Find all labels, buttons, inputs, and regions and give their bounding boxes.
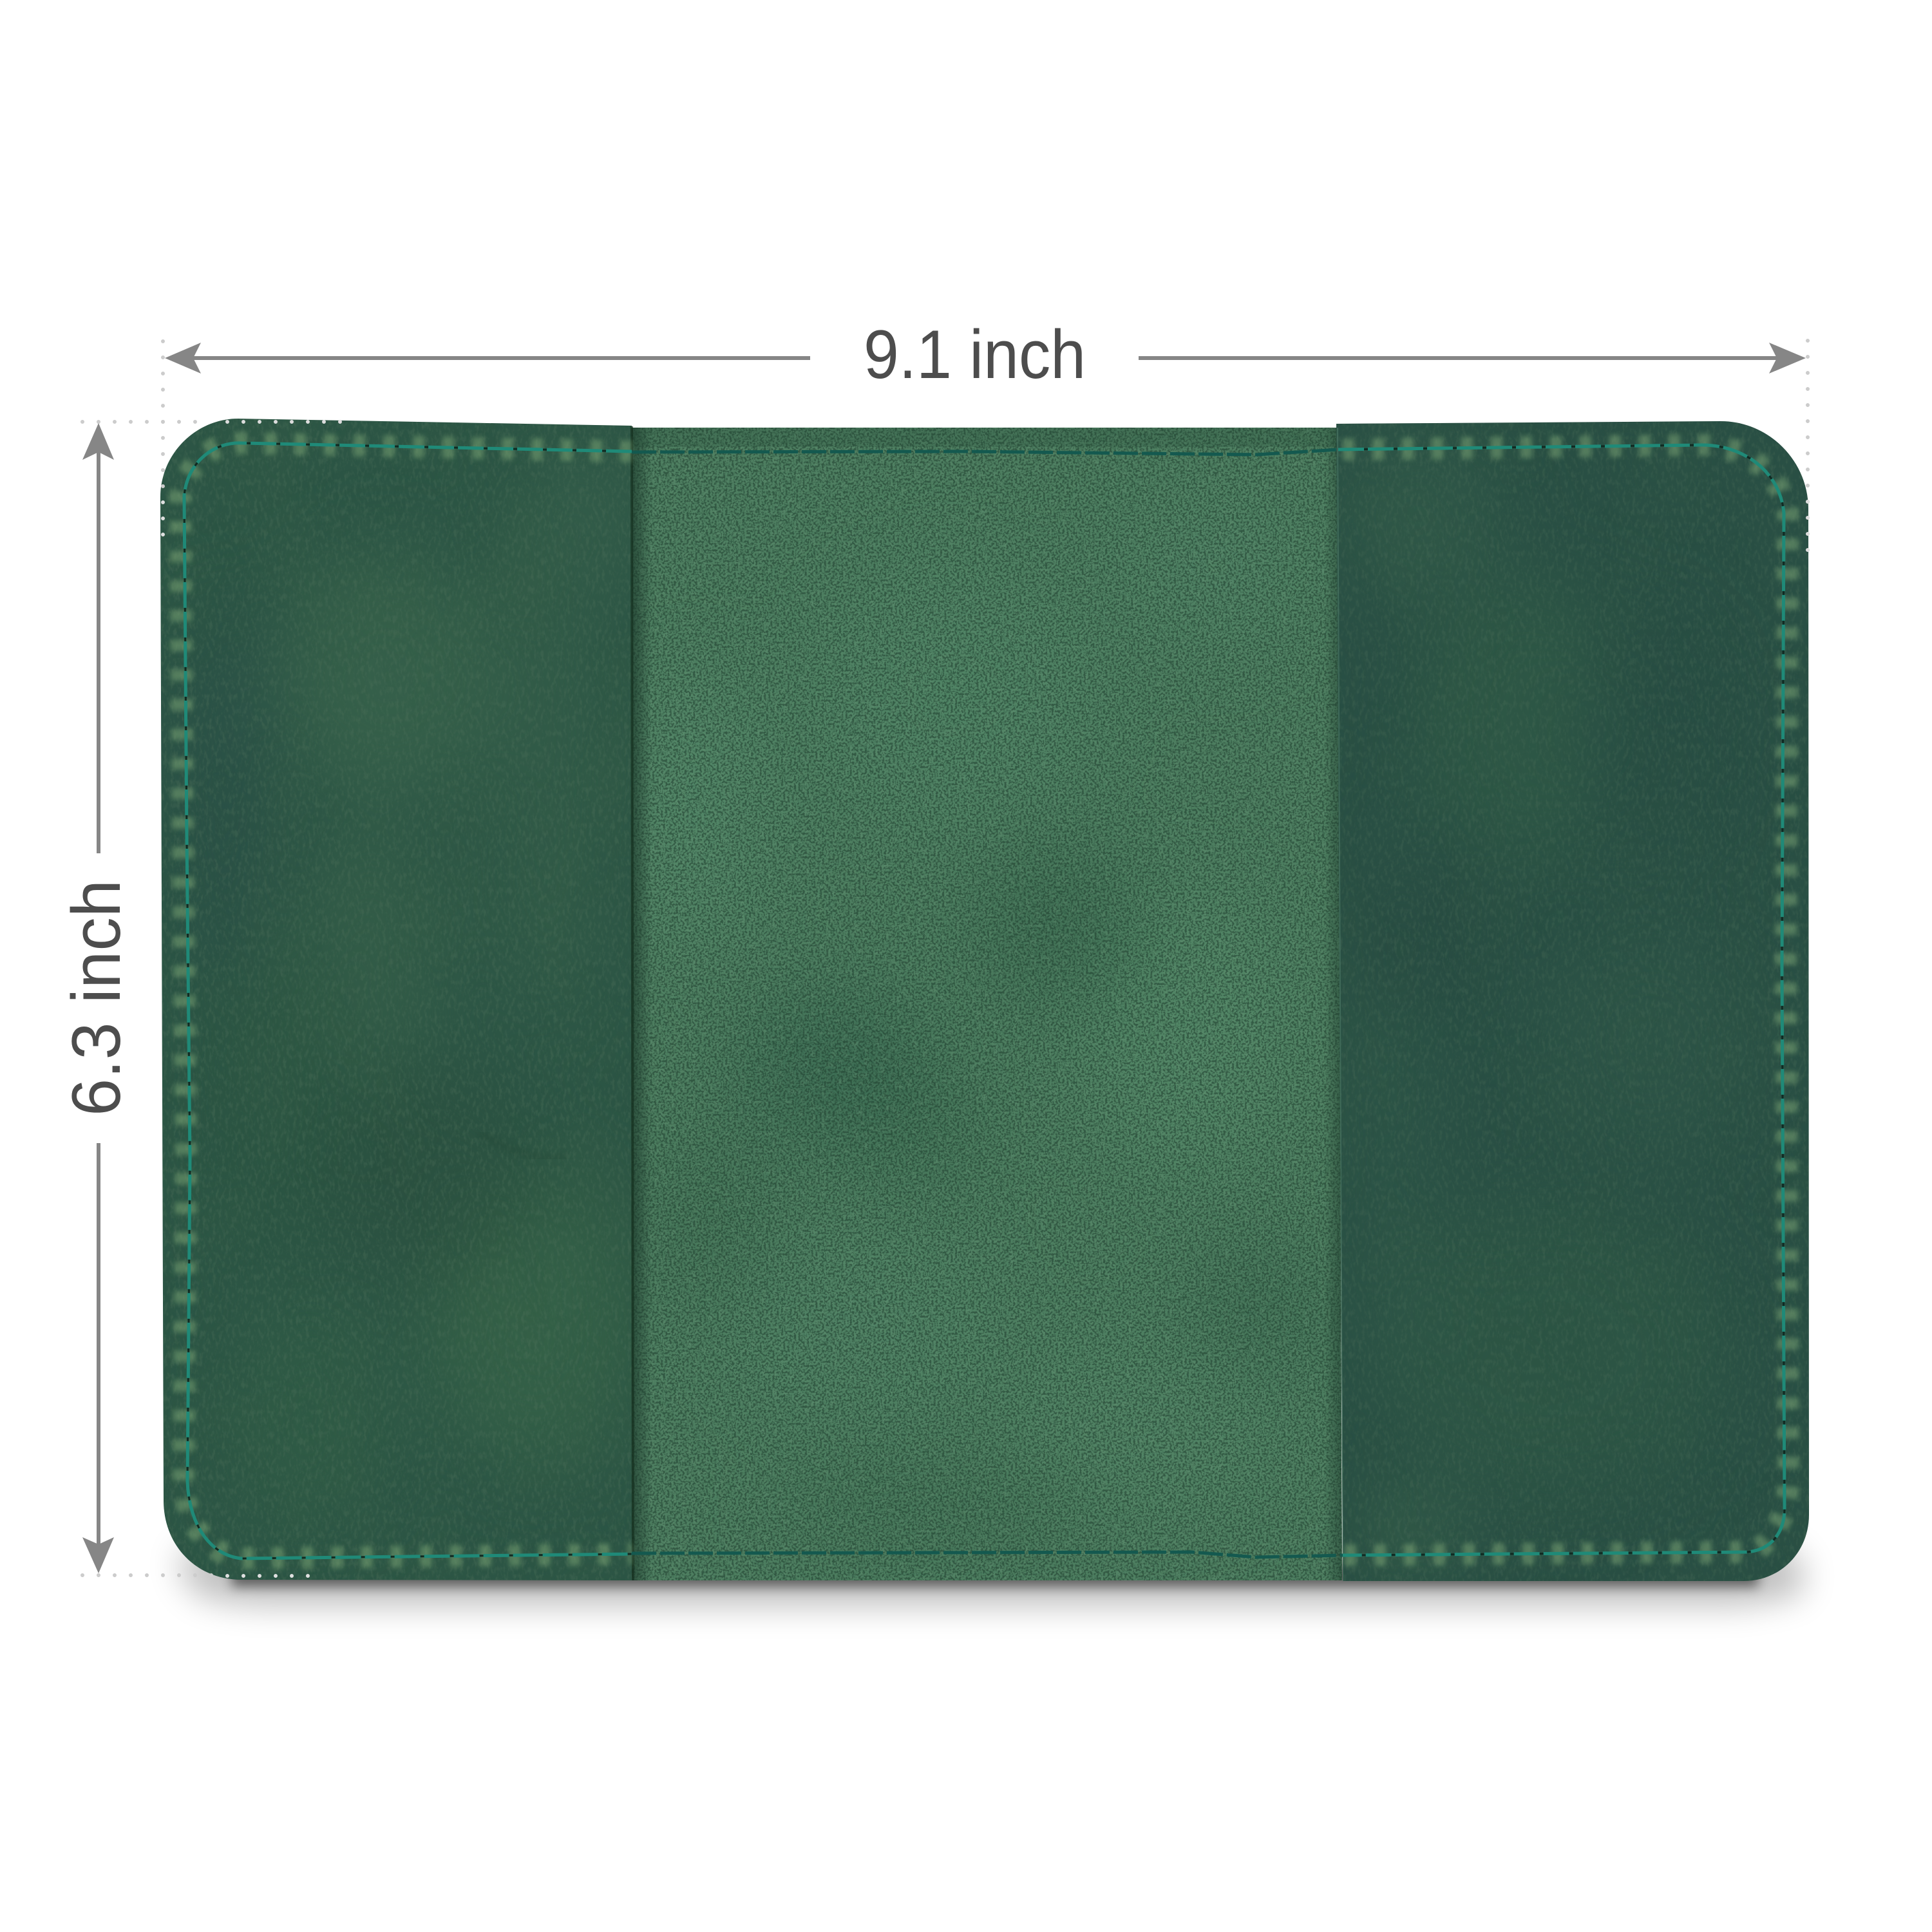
height dimension arrow: top part [82,423,114,853]
panel: right leather pocket [1333,412,1816,1587]
stitching: thread [184,443,1785,1558]
height dimension arrow: bottom part [82,1143,114,1573]
width dimension arrow: left part [165,343,810,374]
wallet drop shadow [180,1549,1803,1605]
crease mark [480,1133,567,1158]
width dimension arrow: right part [1139,343,1806,374]
panel: centre suede lining [621,425,1346,1584]
pocket edge lines [632,426,633,1580]
width label: 9.1 inch [864,316,1086,393]
panel: left leather pocket [155,412,644,1587]
dotted guide lines [82,341,1808,1576]
open leather wallet [155,412,1816,1587]
stitch wear marks [180,443,1788,1558]
height label: 6.3 inch [57,880,135,1116]
